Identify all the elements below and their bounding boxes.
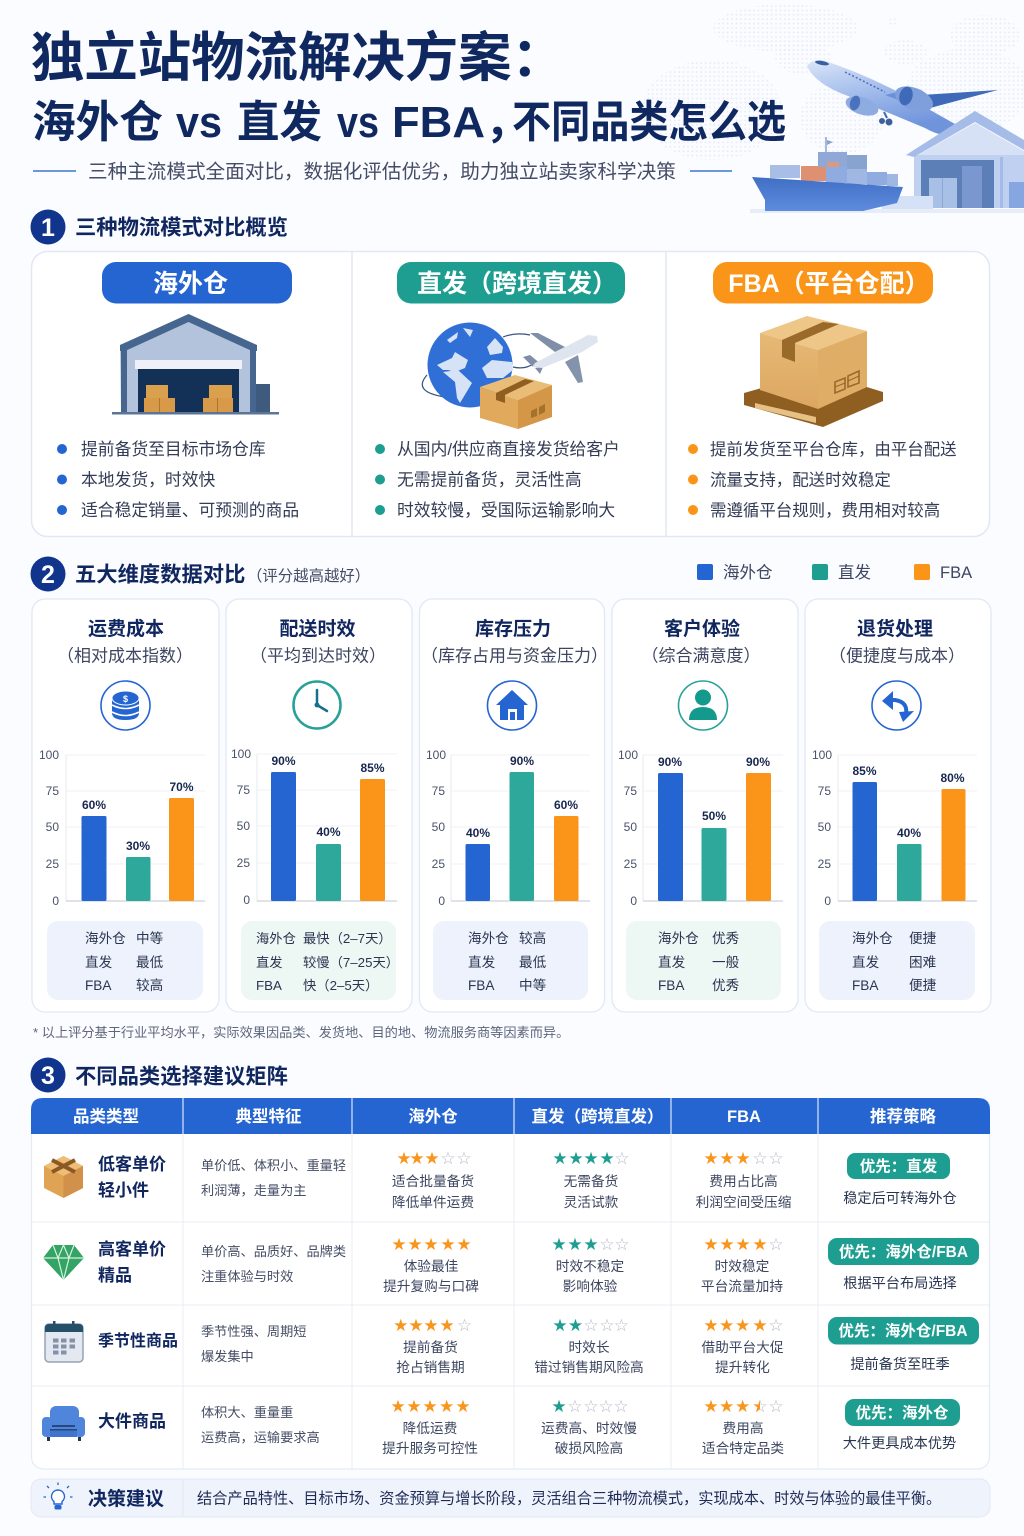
table: category recommendation matrix xyxy=(31,1098,990,1469)
row: large items: 提升服务可控性 xyxy=(382,1441,478,1456)
row: seasonal goods: ★★★★ xyxy=(393,1316,455,1336)
bar chart: returns handling: 85% xyxy=(852,764,877,778)
ground strip xyxy=(750,209,1024,213)
row: seasonal goods: 季节性强、周期短 xyxy=(201,1324,306,1339)
summary: customer experience: 直发 xyxy=(658,955,686,970)
row: large items: 体积大、重量重 xyxy=(201,1405,293,1420)
summary: shipping cost: 直发 xyxy=(85,955,113,970)
bar chart: delivery time: 40% xyxy=(316,825,341,839)
pill: direct shipping xyxy=(397,262,625,304)
row: large items: 运费高，运输要求高 xyxy=(201,1429,320,1445)
bar chart: delivery time: 50 xyxy=(237,819,250,833)
pill: FBA xyxy=(713,262,933,304)
title line 2 xyxy=(32,98,786,147)
summary: returns handling: FBA xyxy=(852,978,879,993)
bar chart: returns handling: 80% xyxy=(940,771,965,785)
summary: customer experience: 一般 xyxy=(712,955,740,970)
title line 2: 不同品类怎么选 xyxy=(512,98,786,147)
decision advice bar: 结合产品特性、目标市场、资金预算与增长阶段，灵活组合三种物流模式，实现成本、时效与体验的最佳平衡。 xyxy=(197,1490,941,1508)
badge: priority overseas warehouse xyxy=(845,1399,960,1426)
bar chart: delivery time: 85% xyxy=(360,761,385,775)
row: high price premium goods: 体验最佳 xyxy=(404,1259,459,1274)
badge: priority overseas warehouse or FBA: 优先：海外仓/FBA xyxy=(838,1321,968,1340)
decision advice bar: 决策建议 xyxy=(88,1488,164,1510)
section 2 heading: （评分越高越好） xyxy=(247,567,370,585)
bar chart: customer experience xyxy=(618,748,783,908)
bar chart: inventory pressure: 60% xyxy=(554,798,578,812)
row: large items: 大件商品 xyxy=(98,1412,166,1431)
row: large items: ★★★★★ xyxy=(390,1397,471,1417)
row: low price small items: 灵活试款 xyxy=(564,1195,619,1210)
row: large items xyxy=(42,1397,960,1456)
section 2 heading: 2 xyxy=(41,561,55,589)
row: high price premium goods: ☆☆ xyxy=(599,1235,630,1255)
row: low price small items: 降低单件运费 xyxy=(392,1195,474,1210)
bar chart: delivery time: 0 xyxy=(243,893,250,907)
summary: shipping cost: 海外仓 xyxy=(85,931,126,946)
row: large items: ★ xyxy=(551,1397,567,1417)
row: high price premium goods: ☆ xyxy=(768,1235,784,1255)
legend: 海外仓 xyxy=(723,563,773,582)
bar chart: customer experience: 90% xyxy=(746,755,770,769)
bar chart: shipping cost: 30% xyxy=(126,839,150,853)
row: large items: 破损风险高 xyxy=(555,1440,623,1456)
row: large items: ☆☆☆☆ xyxy=(567,1397,629,1417)
row: low price small items: ☆☆ xyxy=(440,1149,472,1169)
bar chart: inventory pressure: 90% xyxy=(510,754,534,768)
warehouse xyxy=(882,111,1024,209)
subtitle: 三种主流模式全面对比，数据化评估优劣，助力独立站卖家科学决策 xyxy=(88,161,676,183)
row: seasonal goods: 时效长 xyxy=(568,1340,610,1355)
panel: customer experience xyxy=(612,599,798,1012)
list: FBA features: 需遵循平台规则，费用相对较高 xyxy=(710,501,940,520)
bar chart: customer experience: 50 xyxy=(624,820,637,834)
summary: delivery time: FBA xyxy=(256,978,282,993)
summary: customer experience: FBA xyxy=(658,978,685,993)
row: low price small items: 轻小件 xyxy=(98,1181,149,1200)
list: direct shipping features: 无需提前备货，灵活性高 xyxy=(397,470,582,490)
bar chart: inventory pressure: 40% xyxy=(466,826,490,840)
row: seasonal goods: ☆ xyxy=(457,1316,472,1336)
row: large items: 大件更具成本优势 xyxy=(843,1436,956,1452)
row: high price premium goods: 根据平台布局选择 xyxy=(843,1276,957,1292)
list: direct shipping features: 从国内/供应商直接发货给客户 xyxy=(397,440,620,459)
row: seasonal goods: 提升转化 xyxy=(715,1360,770,1375)
bar chart: shipping cost: 75 xyxy=(46,784,59,798)
summary: shipping cost: 最低 xyxy=(136,955,164,970)
title xyxy=(31,29,786,147)
bar chart: shipping cost: 100 xyxy=(39,748,59,762)
bar chart: customer experience: 75 xyxy=(624,784,637,798)
section 3 heading: 不同品类选择建议矩阵 xyxy=(75,1064,288,1088)
row: large items: ☆☆ xyxy=(752,1397,784,1417)
bar chart: returns handling: 75 xyxy=(818,784,831,798)
row: high price premium goods: 影响体验 xyxy=(563,1279,618,1294)
summary: shipping cost: 中等 xyxy=(136,930,163,946)
badge: priority overseas warehouse: 优先：海外仓 xyxy=(855,1403,949,1422)
row: seasonal goods xyxy=(45,1316,979,1375)
title line 2: ， xyxy=(485,98,529,147)
row: high price premium goods: ★★★ xyxy=(551,1235,599,1255)
icon: house xyxy=(488,681,536,730)
list: FBA features: 提前发货至平台仓库，由平台配送 xyxy=(710,441,957,459)
summary: returns handling: 困难 xyxy=(909,955,936,970)
bar chart: delivery time: 100 xyxy=(231,747,251,761)
row: high price premium goods xyxy=(43,1235,979,1294)
summary: shipping cost xyxy=(47,921,203,1000)
summary: delivery time: 海外仓 xyxy=(256,931,296,946)
bar chart: returns handling: 40% xyxy=(897,826,921,840)
summary: shipping cost: FBA xyxy=(85,978,112,993)
title line 2: vs xyxy=(176,98,222,147)
panel: delivery time: （平均到达时效） xyxy=(250,646,386,666)
bar chart: customer experience: 50% xyxy=(702,809,726,823)
row: seasonal goods: 爆发集中 xyxy=(201,1349,254,1364)
pill: overseas warehouse xyxy=(102,262,292,304)
row: large items: 降低运费 xyxy=(403,1421,457,1436)
row: large items: 运费高、时效慢 xyxy=(541,1420,637,1436)
bar chart: customer experience: 90% xyxy=(658,755,682,769)
summary: shipping cost: 较高 xyxy=(136,977,163,993)
bar chart: customer experience: 0 xyxy=(630,894,637,908)
bar chart: inventory pressure: 100 xyxy=(426,748,446,762)
summary: returns handling: 直发 xyxy=(852,955,880,970)
bar chart: inventory pressure: 50 xyxy=(432,820,445,834)
panel: three logistics modes xyxy=(32,252,990,536)
row: low price small items: ☆ xyxy=(614,1149,630,1169)
row: low price small items: 适合批量备货 xyxy=(392,1173,474,1189)
panel: returns handling: 退货处理 xyxy=(857,617,933,640)
table header: 海外仓 xyxy=(408,1106,458,1126)
bar chart: returns handling: 25 xyxy=(818,857,831,871)
summary: delivery time: 较慢（7–25天） xyxy=(303,954,399,970)
icon: globe, parcel and plane xyxy=(422,322,598,429)
bar chart: delivery time: 25 xyxy=(237,856,250,870)
panel: delivery time xyxy=(226,599,412,1012)
list: FBA features xyxy=(688,441,957,520)
summary: delivery time: 直发 xyxy=(256,955,283,970)
column: FBA xyxy=(688,262,957,520)
row: high price premium goods: 单价高、品质好、品牌类 xyxy=(201,1243,346,1259)
bar chart: returns handling: 0 xyxy=(824,894,831,908)
column: overseas warehouse xyxy=(57,262,299,520)
icon: light bulb xyxy=(44,1482,72,1510)
section 3 heading: 3 xyxy=(41,1062,55,1090)
summary: customer experience xyxy=(626,921,781,1000)
row: large items: ★ xyxy=(752,1397,768,1417)
cargo ship xyxy=(752,137,903,211)
icon: clock xyxy=(294,682,340,728)
row: high price premium goods: ★★★★★ xyxy=(391,1235,472,1255)
icon: warehouse xyxy=(112,314,279,414)
row: seasonal goods: 抢占销售期 xyxy=(396,1359,465,1375)
section 3 heading xyxy=(30,1058,288,1092)
section 1 heading: 三种物流模式对比概览 xyxy=(75,216,288,240)
bar chart: delivery time xyxy=(231,747,397,907)
icon: sofa xyxy=(42,1406,85,1441)
summary: inventory pressure: 海外仓 xyxy=(468,931,509,946)
row: low price small items: 费用占比高 xyxy=(709,1173,778,1189)
pill: direct shipping: 直发（跨境直发） xyxy=(417,270,617,298)
row: low price small items: 单价低、体积小、重量轻 xyxy=(201,1158,346,1173)
panel: returns handling xyxy=(805,599,991,1012)
bar chart: delivery time: 75 xyxy=(237,783,250,797)
row: large items: 费用高 xyxy=(722,1420,764,1436)
panel: shipping cost xyxy=(32,599,219,1012)
title line 1: 独立站物流解决方案： xyxy=(31,29,565,88)
row: high price premium goods: 提升复购与口碑 xyxy=(383,1278,479,1294)
summary: customer experience: 海外仓 xyxy=(658,931,699,946)
column: direct shipping xyxy=(375,262,625,520)
section 1 heading xyxy=(30,210,288,244)
badge: priority direct: 优先：直发 xyxy=(860,1156,938,1176)
badge: priority overseas warehouse or FBA xyxy=(828,1238,979,1265)
summary: delivery time: 最快（2–7天） xyxy=(303,931,392,946)
badge: priority overseas warehouse or FBA xyxy=(828,1317,979,1344)
bar chart: customer experience: 25 xyxy=(624,857,637,871)
summary: inventory pressure: 中等 xyxy=(519,977,546,993)
decision advice bar xyxy=(31,1479,990,1517)
row: low price small items: ★★★ xyxy=(703,1149,751,1169)
bar chart: customer experience: 100 xyxy=(618,748,638,762)
list: FBA features: 流量支持，配送时效稳定 xyxy=(710,472,891,490)
panel: delivery time: 配送时效 xyxy=(279,618,356,640)
legend: 直发 xyxy=(838,563,871,582)
bar chart: inventory pressure xyxy=(426,748,590,908)
badge: priority overseas warehouse or FBA: 优先：海外仓/FBA xyxy=(839,1242,968,1261)
bar chart: inventory pressure: 0 xyxy=(438,894,445,908)
bar chart: shipping cost: 70% xyxy=(169,780,194,794)
row: low price small items: ☆☆ xyxy=(752,1149,784,1169)
title line 2: FBA xyxy=(392,98,485,147)
icon: coins: $ xyxy=(123,694,128,704)
summary: customer experience: 优秀 xyxy=(712,931,740,946)
bar chart: returns handling: 100 xyxy=(812,748,832,762)
table header: 品类类型 xyxy=(73,1107,139,1126)
panel: inventory pressure xyxy=(420,599,608,1012)
row: seasonal goods: ★★ xyxy=(552,1316,583,1336)
summary: delivery time xyxy=(241,921,399,1000)
bar chart: delivery time: 90% xyxy=(271,754,296,768)
panel: shipping cost: 运费成本 xyxy=(88,617,164,640)
badge: priority direct xyxy=(847,1153,950,1179)
row: large items: 适合特定品类 xyxy=(702,1441,784,1456)
icon: coins xyxy=(101,681,150,730)
row: low price small items: 利润薄，走量为主 xyxy=(201,1183,306,1198)
row: seasonal goods: 借助平台大促 xyxy=(701,1340,784,1355)
row: seasonal goods: ☆☆☆ xyxy=(583,1316,629,1336)
row: seasonal goods: 错过销售期风险高 xyxy=(534,1359,644,1375)
summary: returns handling: 便捷 xyxy=(909,931,937,946)
row: high price premium goods: 平台流量加持 xyxy=(701,1279,783,1294)
summary: inventory pressure xyxy=(433,921,588,1000)
row: seasonal goods: ☆ xyxy=(768,1316,784,1336)
summary: delivery time: 快（2–5天） xyxy=(303,978,378,993)
row: seasonal goods: 提前备货至旺季 xyxy=(850,1356,950,1373)
row: low price small items: ★★★ xyxy=(396,1149,440,1169)
section 1 heading: 1 xyxy=(41,214,55,242)
bar chart: returns handling xyxy=(812,748,977,908)
row: high price premium goods: 时效不稳定 xyxy=(556,1259,625,1274)
icon: return arrows xyxy=(872,681,921,730)
row: high price premium goods: ★★★★ xyxy=(703,1235,768,1255)
icon: parcel xyxy=(44,1156,83,1198)
row: seasonal goods: 提前备货 xyxy=(403,1339,458,1355)
icon: diamond xyxy=(43,1245,84,1280)
row: low price small items: 利润空间受压缩 xyxy=(696,1195,792,1210)
summary: inventory pressure: 最低 xyxy=(519,955,547,970)
row: high price premium goods: 精品 xyxy=(98,1266,132,1285)
list: overseas warehouse features: 提前备货至目标市场仓库 xyxy=(81,440,266,459)
table header: FBA xyxy=(727,1108,761,1126)
table header: 推荐策略 xyxy=(870,1106,936,1126)
section 2 heading xyxy=(30,556,370,592)
bar chart: shipping cost: 25 xyxy=(46,857,59,871)
row: low price small items xyxy=(44,1149,957,1210)
list: overseas warehouse features: 适合稳定销量、可预测的商品 xyxy=(81,501,299,520)
section 2 heading: 五大维度数据对比 xyxy=(75,562,245,586)
summary: returns handling xyxy=(819,921,975,1000)
panel: customer experience: 客户体验 xyxy=(664,617,740,640)
legend: FBA xyxy=(940,564,972,582)
summary: returns handling: 海外仓 xyxy=(852,931,893,946)
panel: shipping cost: （相对成本指数） xyxy=(57,646,193,666)
row: low price small items: 低客单价 xyxy=(98,1154,166,1174)
world map dot pattern xyxy=(642,4,1024,160)
icon: person xyxy=(678,681,728,730)
panel: customer experience: （综合满意度） xyxy=(642,646,760,666)
summary: inventory pressure: FBA xyxy=(468,978,495,993)
list: direct shipping features xyxy=(375,440,620,520)
summary: returns handling: 便捷 xyxy=(909,978,937,993)
panel: inventory pressure: 库存压力 xyxy=(475,618,551,640)
bar chart: returns handling: 50 xyxy=(818,820,831,834)
legend xyxy=(697,563,972,582)
footnote: * 以上评分基于行业平均水平，实际效果因品类、发货地、目的地、物流服务商等因素而异。 xyxy=(33,1024,569,1040)
bar chart: inventory pressure: 25 xyxy=(432,857,445,871)
list: direct shipping features: 时效较慢，受国际运输影响大 xyxy=(397,500,615,520)
row: low price small items: ★★★★ xyxy=(552,1149,615,1169)
header illustration: world map, plane, ship and warehouse xyxy=(642,4,1024,213)
pill: FBA: FBA（平台仓配） xyxy=(728,269,930,298)
summary: inventory pressure: 直发 xyxy=(468,955,496,970)
panel: inventory pressure: （库存占用与资金压力） xyxy=(421,646,608,666)
pill: overseas warehouse: 海外仓 xyxy=(153,270,228,298)
row: high price premium goods: 时效稳定 xyxy=(715,1259,770,1274)
table header xyxy=(31,1098,990,1134)
airplane xyxy=(807,60,998,135)
row: high price premium goods: 注重体验与时效 xyxy=(201,1269,293,1284)
title line 2: 海外仓 xyxy=(32,98,163,147)
bar chart: shipping cost: 0 xyxy=(52,894,59,908)
icon: calendar xyxy=(45,1321,83,1362)
row: high price premium goods: 高客单价 xyxy=(98,1239,166,1259)
table header: 直发（跨境直发） xyxy=(532,1106,664,1126)
summary: inventory pressure: 较高 xyxy=(519,930,546,946)
row: seasonal goods: ★★★★ xyxy=(703,1316,768,1336)
table header: 典型特征 xyxy=(236,1107,302,1126)
list: overseas warehouse features: 本地发货，时效快 xyxy=(81,470,215,490)
title line 2: vs xyxy=(337,98,379,147)
row: seasonal goods: 季节性商品 xyxy=(98,1331,178,1350)
row: low price small items: 稳定后可转海外仓 xyxy=(843,1191,957,1207)
bar chart: shipping cost: 50 xyxy=(46,820,59,834)
summary: customer experience: 优秀 xyxy=(712,978,740,993)
bar chart: shipping cost xyxy=(39,748,205,908)
row: low price small items: 无需备货 xyxy=(564,1173,618,1189)
bar chart: inventory pressure: 75 xyxy=(432,784,445,798)
bar chart: shipping cost: 60% xyxy=(82,798,106,812)
icon: parcel on pallet xyxy=(744,316,883,427)
title line 2: 直发 xyxy=(237,98,322,147)
row: large items: ★★★ xyxy=(703,1397,750,1417)
panel: returns handling: （便捷度与成本） xyxy=(829,646,965,666)
list: overseas warehouse features xyxy=(57,440,299,520)
